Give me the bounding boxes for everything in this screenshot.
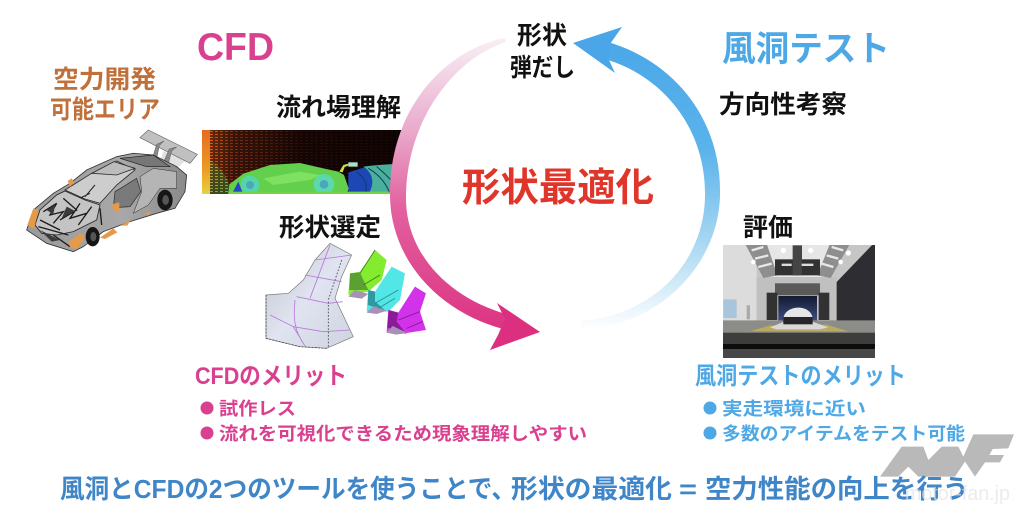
- item: close to real driving: 実走環境に近い: [722, 399, 866, 419]
- summary sentence: [60, 474, 969, 504]
- title: CFD: CFD: [197, 26, 274, 69]
- summary sentence: 空力性能の向上を行う: [705, 474, 969, 504]
- heading: CFD merits: CFDのメリット: [195, 363, 347, 390]
- item: flow visualization: 流れを可視化できるため現象理解しやすい: [219, 424, 587, 444]
- windshield and roof: [65, 161, 135, 203]
- rear wing: [140, 130, 197, 168]
- cyan variant: [367, 267, 405, 314]
- label: shape ideation: 形状: [517, 22, 567, 50]
- label: shape ideation: [510, 22, 575, 82]
- illustration: race car with orange aero areas: [27, 130, 197, 252]
- label: aero development area: [50, 66, 160, 124]
- orange aero parts: [27, 178, 151, 249]
- item: no prototype: 試作レス: [219, 399, 296, 419]
- car body: [27, 153, 187, 252]
- label: flow field understanding: 流れ場理解: [276, 94, 401, 122]
- arrow: blue wind tunnel arc: [573, 27, 720, 330]
- summary sentence: 風洞とCFDの2つのツールを使うことで、: [60, 474, 516, 504]
- list: CFD merits: [200, 399, 587, 444]
- front details: [35, 191, 100, 235]
- item: many items testable: 多数のアイテムをテスト可能: [722, 423, 965, 444]
- label: directional study: 方向性考察: [719, 91, 847, 119]
- label: shape ideation: 弾だし: [510, 54, 575, 82]
- car surface: [228, 162, 407, 195]
- heading: wind tunnel merits: 風洞テストのメリット: [695, 363, 906, 390]
- wheels: [86, 190, 173, 246]
- arrow: pink CFD arc: [390, 38, 540, 350]
- gray base part: [266, 243, 353, 348]
- title: wind tunnel test: 風洞テスト: [722, 30, 890, 69]
- label: aero development area: 可能エリア: [50, 96, 160, 124]
- watermark: site name: motor-fan.jp: [905, 483, 1010, 505]
- green variant: [348, 250, 387, 299]
- photo: wind tunnel facility: [723, 245, 875, 358]
- center heading: shape optimization: 形状最適化: [462, 167, 654, 210]
- summary sentence: 形状の最適化: [511, 474, 672, 504]
- watermark: MF logo: [880, 434, 1014, 477]
- magenta variant: [386, 287, 426, 335]
- summary sentence: =: [679, 474, 697, 504]
- side windows and door: [113, 178, 141, 208]
- label: evaluation: 評価: [743, 214, 793, 242]
- illustration: aero part shape variants: [266, 243, 426, 348]
- list: wind tunnel merits: [704, 399, 965, 444]
- image: CFD flow field: [202, 130, 407, 195]
- label: shape selection: 形状選定: [279, 214, 381, 242]
- label: aero development area: 空力開発: [53, 66, 156, 94]
